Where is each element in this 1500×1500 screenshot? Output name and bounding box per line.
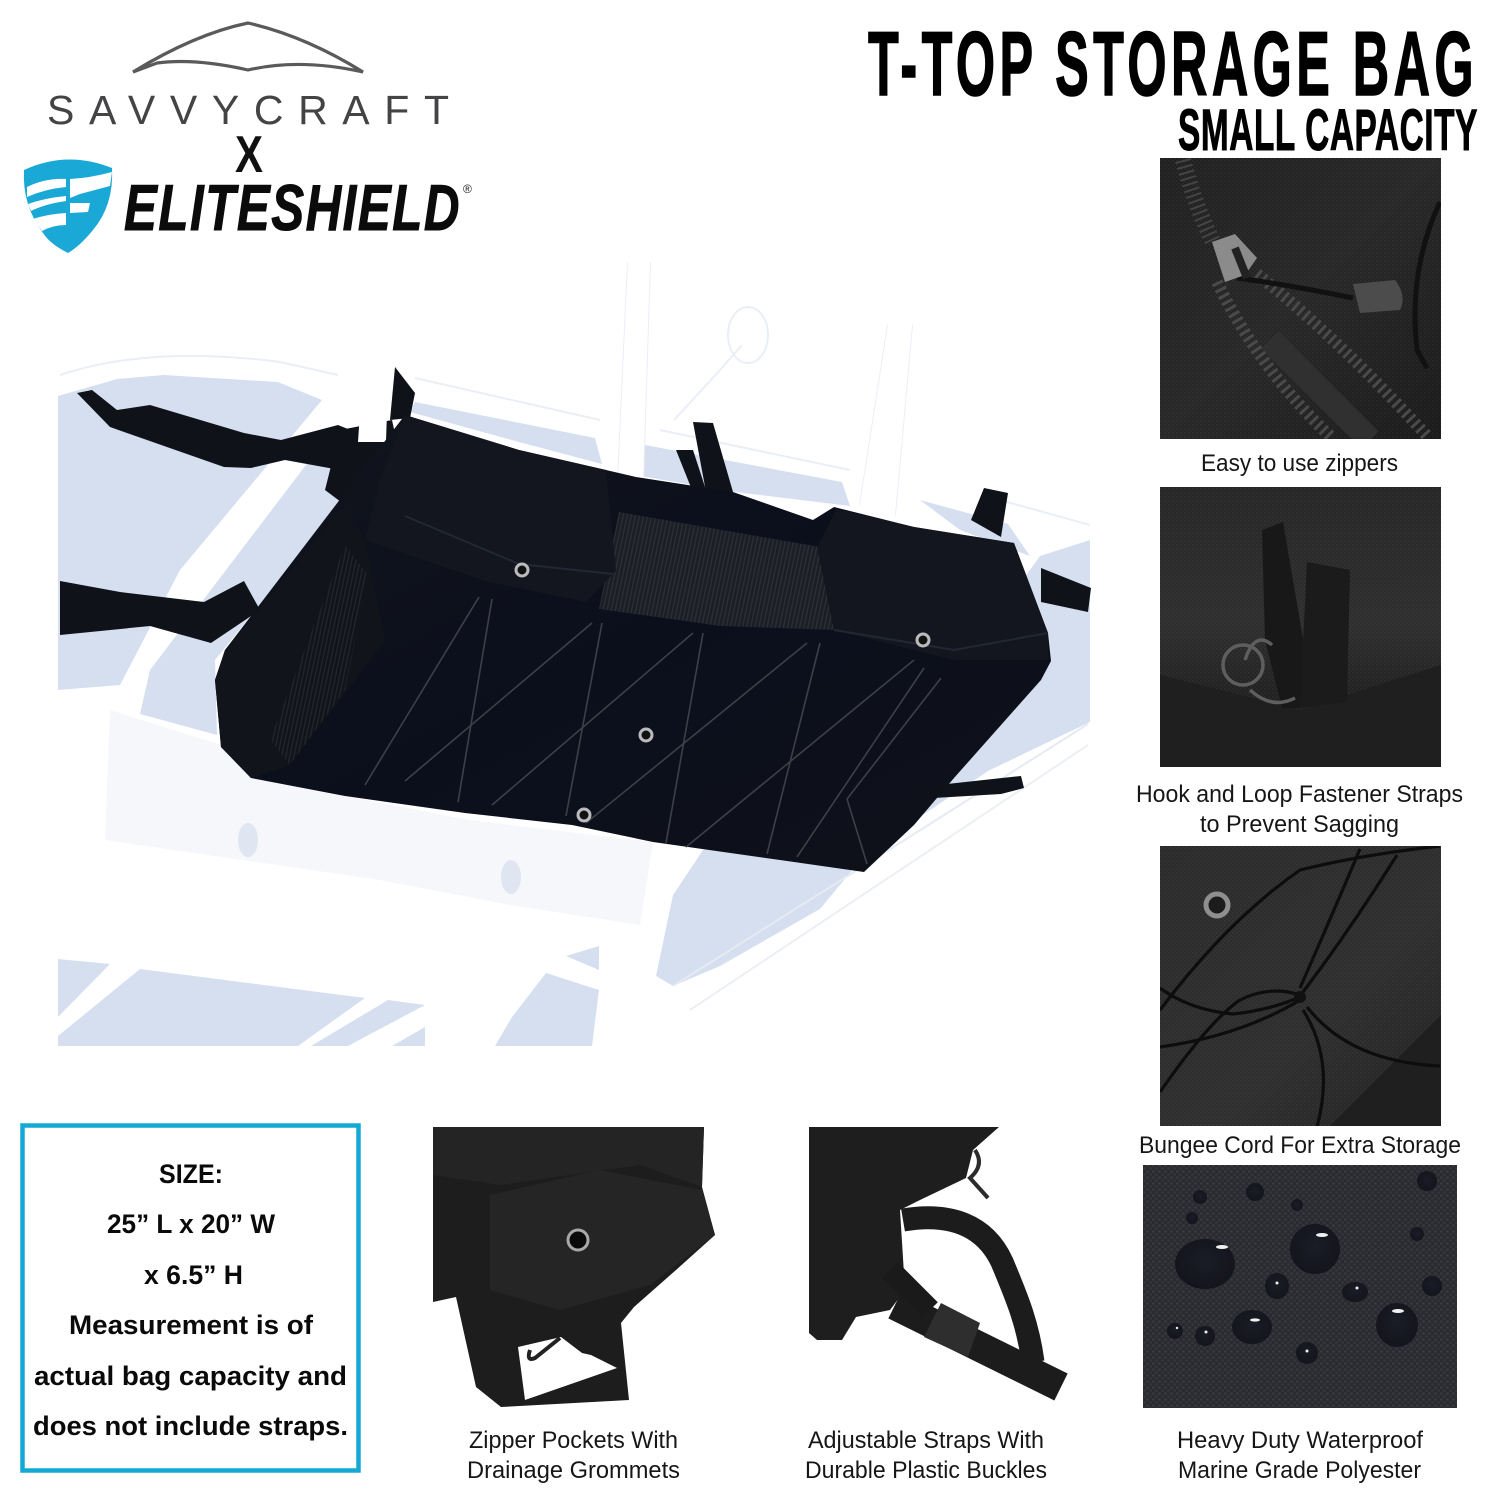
brand logos bbox=[24, 23, 472, 253]
feature photo: waterproof polyester bbox=[1143, 1165, 1457, 1408]
bag body bbox=[215, 415, 1051, 872]
caption: straps: Durable Plastic Buckles bbox=[805, 1457, 1047, 1484]
caption: waterproof bbox=[1177, 1427, 1423, 1484]
size info box: x 6.5” H bbox=[144, 1260, 243, 1290]
pale door panels bbox=[105, 710, 653, 925]
white pole over strap bbox=[358, 262, 392, 442]
registered mark: ® bbox=[463, 182, 472, 196]
caption: hook and loop: Hook and Loop Fastener Straps bbox=[1136, 781, 1463, 808]
zipper pocket right bbox=[817, 509, 1048, 660]
caption: straps: Adjustable Straps With bbox=[808, 1427, 1044, 1454]
caption: zipper pockets: Zipper Pockets With bbox=[469, 1427, 678, 1454]
feature photo: hook and loop straps bbox=[1160, 487, 1441, 767]
white rod holder poles bbox=[618, 262, 912, 515]
mesh side panel bbox=[215, 505, 385, 778]
caption: waterproof: Heavy Duty Waterproof bbox=[1177, 1427, 1423, 1454]
caption: zipper pockets: Drainage Grommets bbox=[467, 1457, 680, 1484]
caption: waterproof: Marine Grade Polyester bbox=[1178, 1457, 1421, 1484]
caption: zipper pockets bbox=[467, 1427, 680, 1484]
size info box: Measurement is of bbox=[69, 1310, 314, 1340]
size info box: does not include straps. bbox=[33, 1411, 348, 1441]
caption: hook and loop: to Prevent Sagging bbox=[1200, 811, 1399, 838]
EliteShield wordmark: ELITESHIELD bbox=[124, 171, 461, 244]
photo background: sky and T-top frame bbox=[58, 262, 1090, 1046]
frame rails and rod holders bbox=[60, 262, 1090, 1010]
straps bbox=[60, 367, 1091, 798]
Savvycraft wordmark: SAVVYCRAFT bbox=[47, 87, 449, 133]
caption: zippers: Easy to use zippers bbox=[1201, 450, 1398, 477]
Savvycraft canopy mark bbox=[133, 23, 363, 72]
feature photo: bungee cord bbox=[1160, 846, 1441, 1127]
EliteShield shield icon bbox=[24, 159, 112, 253]
X between brands: X bbox=[235, 126, 263, 184]
caption: straps bbox=[805, 1427, 1047, 1484]
feature photo: zipper pockets with grommets bbox=[433, 1127, 715, 1407]
grommets bbox=[516, 564, 929, 821]
caption: hook and loop bbox=[1136, 781, 1463, 838]
caption: bungee: Bungee Cord For Extra Storage bbox=[1139, 1132, 1461, 1159]
size info box: 25” L x 20” W bbox=[107, 1209, 275, 1239]
center mesh panel bbox=[599, 512, 834, 630]
feature photo: zippers bbox=[1160, 158, 1441, 440]
size info box: SIZE: bbox=[159, 1159, 223, 1189]
main product photo: bag under T-top bbox=[58, 262, 1091, 1046]
title bbox=[868, 14, 1478, 163]
zipper pocket left bbox=[365, 415, 616, 602]
bungee cords bbox=[365, 597, 941, 864]
feature photo: adjustable straps and buckles bbox=[809, 1127, 1061, 1387]
size info box bbox=[22, 1126, 358, 1470]
size info box: actual bag capacity and bbox=[34, 1361, 347, 1391]
